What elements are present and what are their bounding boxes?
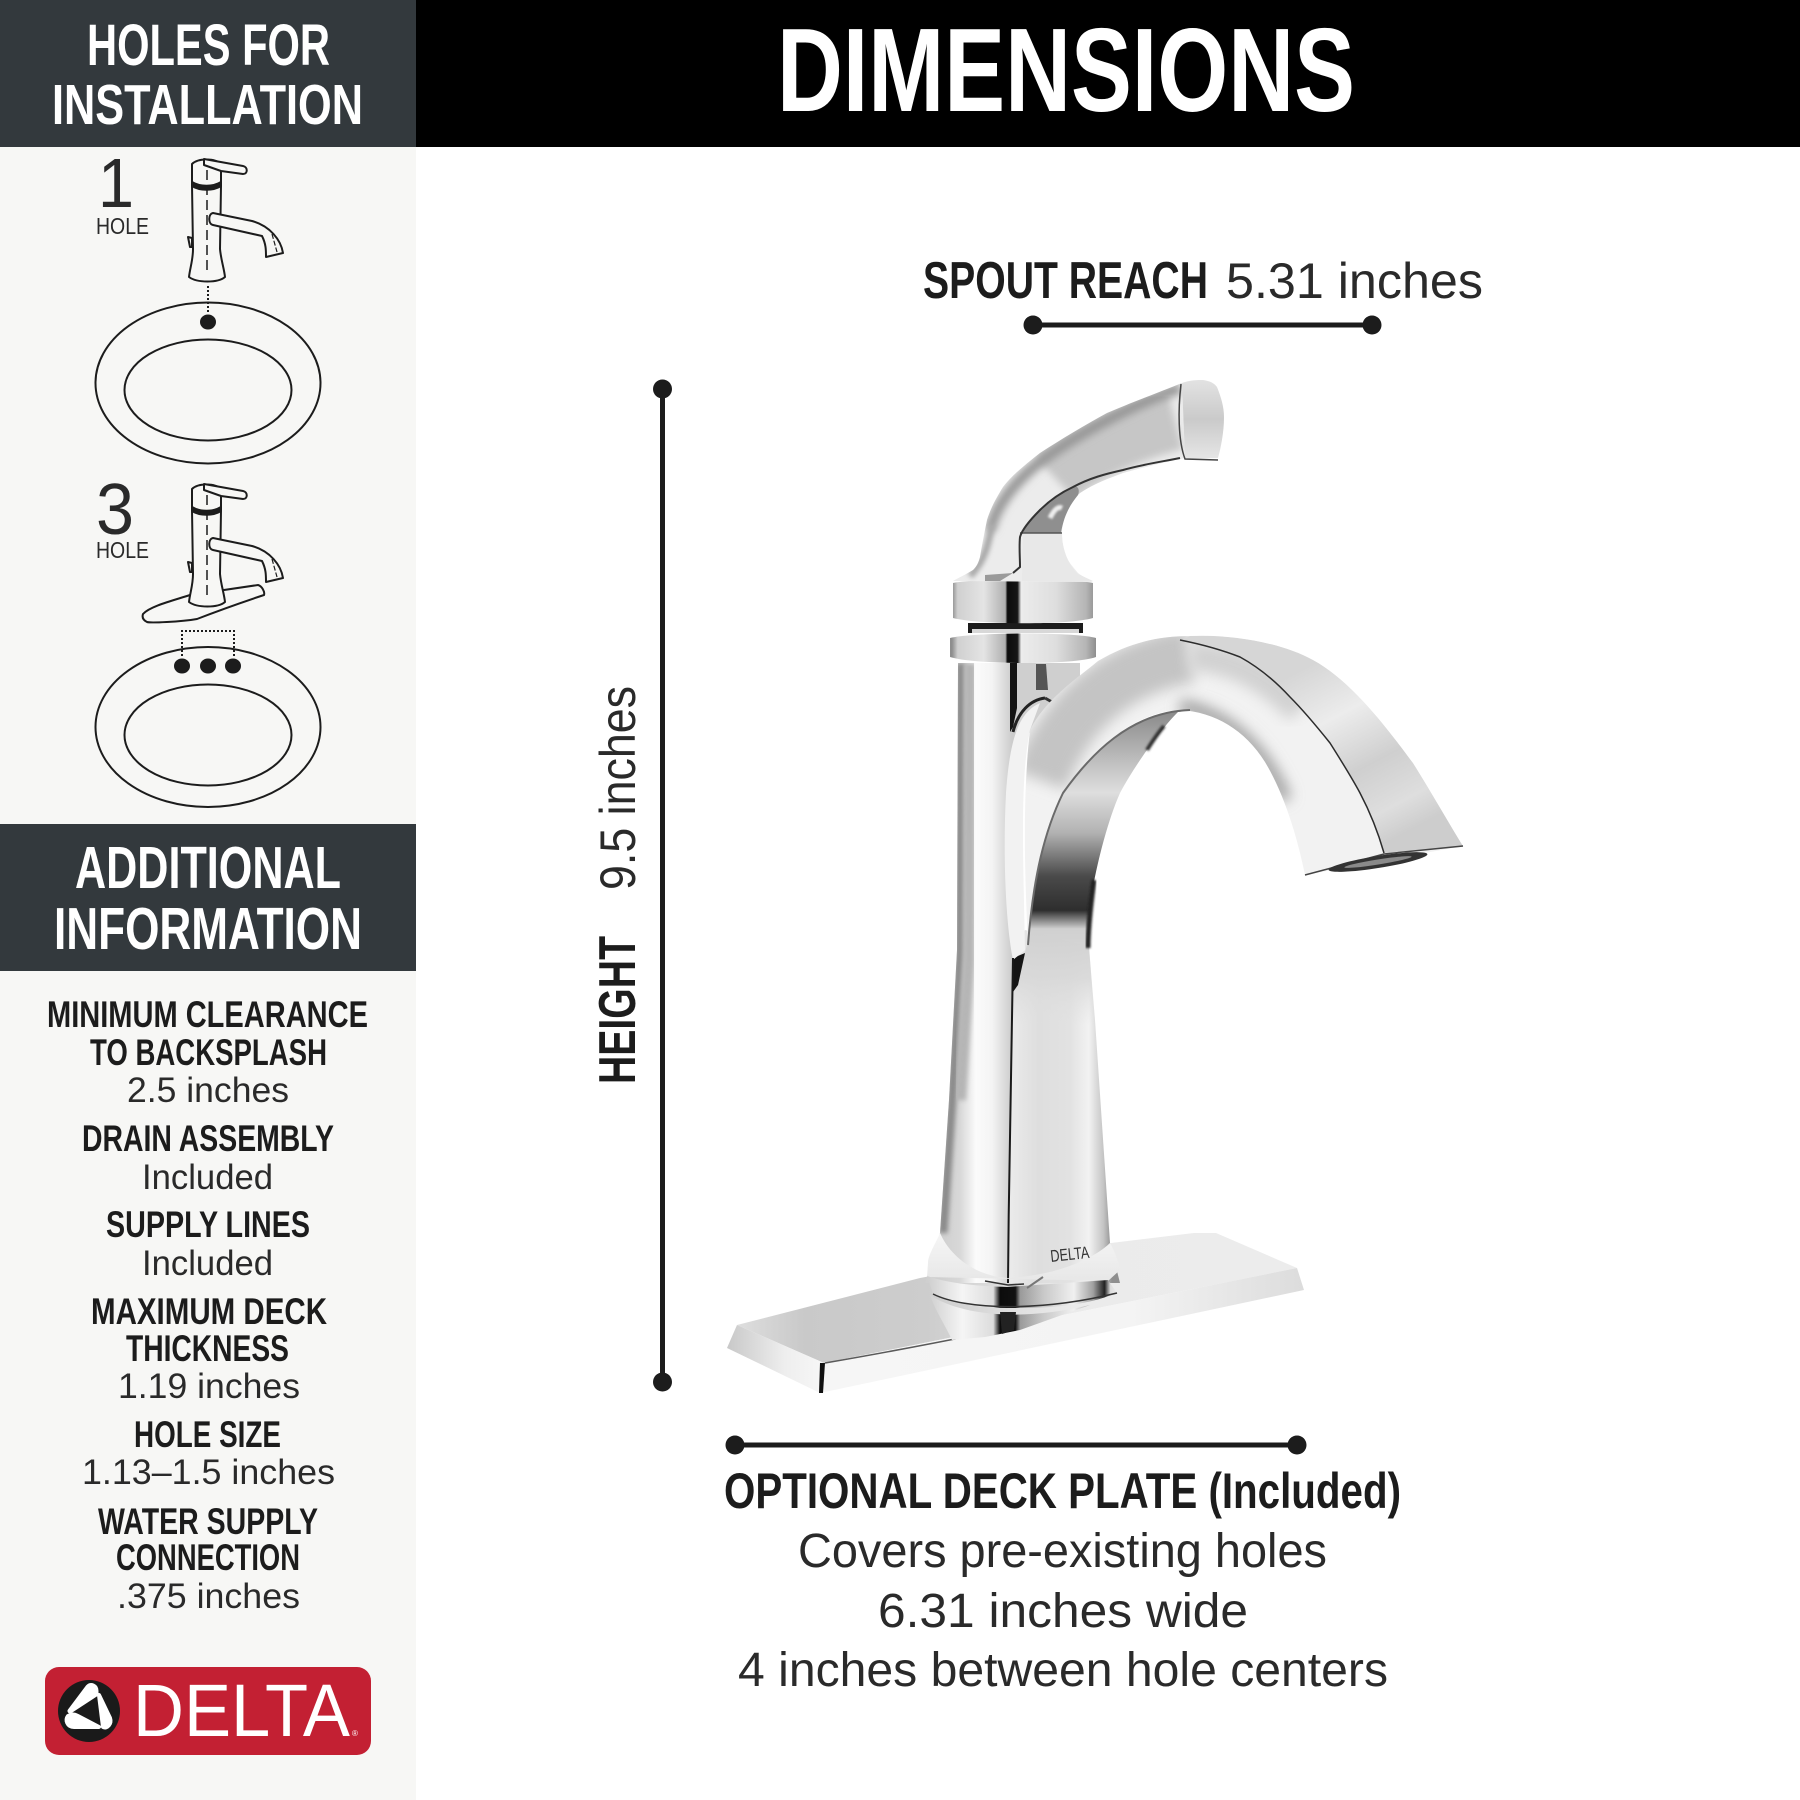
header: additional information: INFORMATION	[54, 896, 362, 962]
label	[923, 252, 1483, 310]
info: maximum deck thickness: 1.19 inches	[118, 1367, 300, 1406]
label: 5.31 inches	[1226, 253, 1483, 309]
icon: three-hole faucet	[188, 484, 283, 606]
logo: delta: ®	[352, 1729, 358, 1738]
icon: deck plate	[143, 585, 264, 622]
text: optional deck plate: Covers pre-existing holes	[798, 1525, 1327, 1578]
header: holes for installation: HOLES FOR	[87, 13, 330, 78]
label: 1 hole	[96, 144, 149, 239]
info: drain assembly: DRAIN ASSEMBLY	[82, 1118, 334, 1159]
info: minimum clearance: 2.5 inches	[127, 1071, 289, 1110]
info: water supply connection	[98, 1501, 318, 1616]
header: dimensions: DIMENSIONS	[777, 4, 1355, 137]
arrow: height line	[653, 380, 672, 1392]
diagram: 1 hole installation	[96, 144, 320, 464]
info: water supply connection: WATER SUPPLY	[98, 1501, 318, 1542]
label: 3 hole: 3	[96, 470, 134, 550]
faucet brand mark: DELTA	[1049, 1243, 1091, 1266]
info: hole size	[82, 1414, 335, 1492]
info: maximum deck thickness	[91, 1291, 327, 1406]
arrow: reach line	[1024, 316, 1382, 334]
label: 9.5 inches	[590, 686, 646, 890]
info: water supply connection: .375 inches	[117, 1577, 300, 1616]
dark wedge	[1013, 953, 1025, 992]
label	[589, 686, 647, 1084]
info: water supply connection: CONNECTION	[116, 1537, 300, 1578]
arch edge	[1028, 710, 1190, 945]
base bulge	[927, 1233, 1120, 1281]
spout	[1025, 636, 1463, 945]
info: drain assembly	[82, 1118, 334, 1197]
icon: sink with one hole	[96, 302, 320, 464]
dimension: spout reach	[923, 252, 1483, 334]
text: optional deck plate: 6.31 inches wide	[878, 1585, 1248, 1638]
sidebar panel	[0, 0, 416, 1800]
header: holes for installation: INSTALLATION	[52, 73, 363, 137]
header: additional information: ADDITIONAL	[75, 835, 341, 901]
label: 1 hole: HOLE	[96, 213, 149, 239]
area behind spout	[1010, 663, 1080, 733]
body centre line	[1008, 958, 1013, 1283]
aerator	[1328, 848, 1428, 876]
faucet body right half	[1007, 930, 1120, 1283]
reflection edge	[1088, 880, 1094, 948]
dimension: deck plate line	[726, 1436, 1306, 1454]
info: supply lines	[106, 1204, 310, 1283]
info: drain assembly: Included	[142, 1158, 273, 1197]
white tube highlight	[1005, 703, 1040, 960]
label: 3 hole	[96, 470, 149, 563]
reflection on plate	[930, 1295, 1090, 1340]
spout crease	[1180, 640, 1384, 853]
diagram: 3 hole installation	[96, 470, 320, 807]
dotted guide	[207, 286, 209, 312]
info: minimum clearance: MINIMUM CLEARANCE	[47, 994, 368, 1035]
header: dimensions	[416, 0, 1800, 147]
info: minimum clearance: TO BACKSPLASH	[90, 1032, 327, 1073]
text: optional deck plate: OPTIONAL DECK PLATE (Included)	[724, 1463, 1401, 1519]
faucet body left half	[940, 663, 1016, 1283]
base ring	[927, 1276, 1117, 1308]
reflection under arch	[1013, 711, 1185, 1025]
logo: delta: DELTA	[133, 1669, 351, 1752]
label: SPOUT REACH	[923, 252, 1208, 310]
collars	[950, 579, 1096, 663]
icon: single-hole faucet	[188, 159, 283, 282]
info: minimum clearance	[47, 994, 368, 1110]
deck plate	[727, 1233, 1304, 1393]
label: HEIGHT	[589, 936, 647, 1084]
faucet photo	[727, 380, 1463, 1393]
info: supply lines: SUPPLY LINES	[106, 1204, 310, 1245]
text: optional deck plate: 4 inches between hole centers	[738, 1644, 1388, 1697]
spout tip edge	[1305, 846, 1463, 875]
logo: delta	[45, 1667, 371, 1755]
info: supply lines: Included	[142, 1244, 273, 1283]
label: 1 hole: 1	[98, 144, 134, 222]
label: 3 hole: HOLE	[96, 537, 149, 563]
info: hole size: 1.13–1.5 inches	[82, 1453, 335, 1492]
dimension: height	[589, 380, 672, 1392]
handle	[953, 380, 1224, 582]
icon: sink with three holes	[96, 647, 320, 807]
header: holes for installation	[0, 0, 416, 147]
header: additional information	[0, 824, 416, 971]
text: optional deck plate	[724, 1463, 1401, 1697]
info: maximum deck thickness: MAXIMUM DECK	[91, 1291, 327, 1332]
info: maximum deck thickness: THICKNESS	[126, 1328, 289, 1369]
dotted guide	[182, 631, 234, 656]
info: hole size: HOLE SIZE	[134, 1414, 281, 1455]
